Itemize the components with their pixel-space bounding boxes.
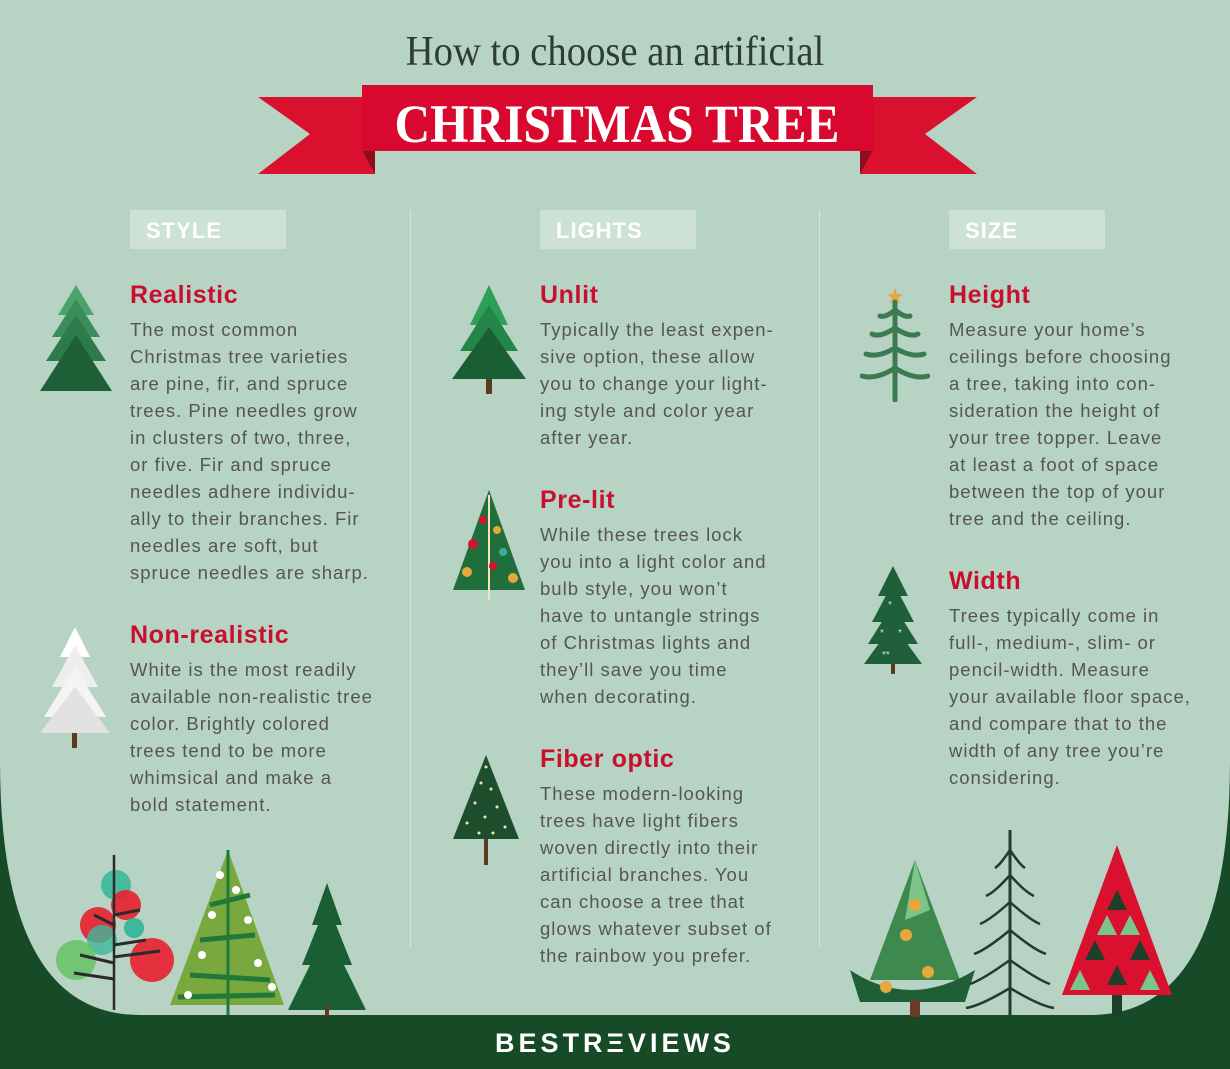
text: pre-lit: have to untangle strings [540, 605, 760, 626]
text: width: your available floor space, [949, 686, 1191, 707]
text: realistic: Christmas tree varieties [130, 346, 348, 367]
text: width: considering. [949, 767, 1061, 788]
text: width: pencil-width. Measure [949, 659, 1150, 680]
text: fiber optic: glows whatever subset of [540, 918, 772, 939]
label: size: SIZE [965, 218, 1018, 243]
text: realistic: needles are soft, but [130, 535, 319, 556]
heading: non-realistic: Non-realistic [130, 621, 289, 649]
icon: white tree [40, 627, 110, 748]
text: width [949, 605, 1191, 788]
text: unlit: after year. [540, 427, 633, 448]
icon: fiber optic tree [453, 755, 519, 865]
text: non-realistic: whimsical and make a [130, 767, 332, 788]
text: fiber optic: trees have light fibers [540, 810, 739, 831]
heading: height: Height [949, 281, 1030, 309]
text: height: Measure your home’s [949, 319, 1146, 340]
text: width: Trees typically come in [949, 605, 1159, 626]
text: non-realistic [130, 659, 373, 815]
text: unlit [540, 319, 774, 448]
heading: unlit: Unlit [540, 281, 599, 309]
label: size [949, 210, 1105, 249]
text: realistic: spruce needles are sharp. [130, 562, 369, 583]
text: pre-lit: they’ll save you time [540, 659, 728, 680]
bottom-right trees [850, 830, 1172, 1017]
text: non-realistic: color. Brightly colored [130, 713, 330, 734]
label: lights [540, 210, 696, 249]
text: realistic: trees. Pine needles grow [130, 400, 358, 421]
text: unlit: sive option, these allow [540, 346, 755, 367]
text: width: full-, medium-, slim- or [949, 632, 1156, 653]
text: fiber optic: These modern-looking [540, 783, 744, 804]
text: width: width of any tree you’re [949, 740, 1164, 761]
icon: width tree: * [888, 600, 892, 611]
icon: width tree [864, 566, 922, 674]
text: fiber optic: the rainbow you prefer. [540, 945, 751, 966]
heading: pre-lit: Pre-lit [540, 486, 615, 514]
text: height: at least a foot of space [949, 454, 1159, 475]
text: pre-lit: bulb style, you won’t [540, 578, 728, 599]
ribbon banner: CHRISTMAS TREE [394, 94, 840, 154]
heading: width: Width [949, 567, 1021, 595]
text: height: your tree topper. Leave [949, 427, 1162, 448]
text: fiber optic [540, 783, 772, 966]
text: height [949, 319, 1172, 529]
text: unlit: you to change your light- [540, 373, 768, 394]
icon: width tree: ** [882, 650, 890, 661]
text: width: and compare that to the [949, 713, 1167, 734]
icon: pre-lit tree [453, 490, 525, 600]
text: pre-lit: While these trees lock [540, 524, 743, 545]
icon: unlit tree [452, 285, 526, 394]
text: pre-lit: of Christmas lights and [540, 632, 751, 653]
logo: bestreviews: BESTRΞVIEWS [495, 1028, 735, 1058]
label: style: STYLE [146, 218, 222, 243]
text: non-realistic: available non-realistic tree [130, 686, 373, 707]
text: non-realistic: trees tend to be more [130, 740, 327, 761]
heading: realistic: Realistic [130, 281, 238, 309]
text: height: a tree, taking into con- [949, 373, 1156, 394]
text: realistic: ally to their branches. Fir [130, 508, 360, 529]
text: realistic: needles adhere individu- [130, 481, 356, 502]
icon: width tree: * [898, 628, 902, 639]
text: unlit: ing style and color year [540, 400, 754, 421]
text: fiber optic: can choose a tree that [540, 891, 745, 912]
text: height: between the top of your [949, 481, 1165, 502]
heading: fiber optic: Fiber optic [540, 745, 674, 773]
title: How to choose an artificial [406, 29, 824, 75]
icon: realistic tree [40, 285, 112, 391]
icon: width tree: * [880, 628, 884, 639]
text: non-realistic: White is the most readily [130, 659, 357, 680]
text: height: sideration the height of [949, 400, 1160, 421]
text: non-realistic: bold statement. [130, 794, 272, 815]
label: lights: LIGHTS [556, 218, 643, 243]
text: realistic: are pine, fir, and spruce [130, 373, 348, 394]
text: fiber optic: woven directly into their [540, 837, 758, 858]
text: pre-lit: when decorating. [540, 686, 697, 707]
label: style [130, 210, 286, 249]
text: fiber optic: artificial branches. You [540, 864, 749, 885]
text: pre-lit [540, 524, 767, 707]
text: realistic: The most common [130, 319, 298, 340]
text: realistic: in clusters of two, three, [130, 427, 351, 448]
text: pre-lit: you into a light color and [540, 551, 767, 572]
text: height: tree and the ceiling. [949, 508, 1131, 529]
text: unlit: Typically the least expen- [540, 319, 774, 340]
text: realistic [130, 319, 369, 583]
icon: height tree [860, 288, 930, 402]
text: height: ceilings before choosing [949, 346, 1172, 367]
text: realistic: or five. Fir and spruce [130, 454, 332, 475]
bottom-left trees [56, 850, 366, 1017]
ribbon banner [258, 85, 977, 174]
